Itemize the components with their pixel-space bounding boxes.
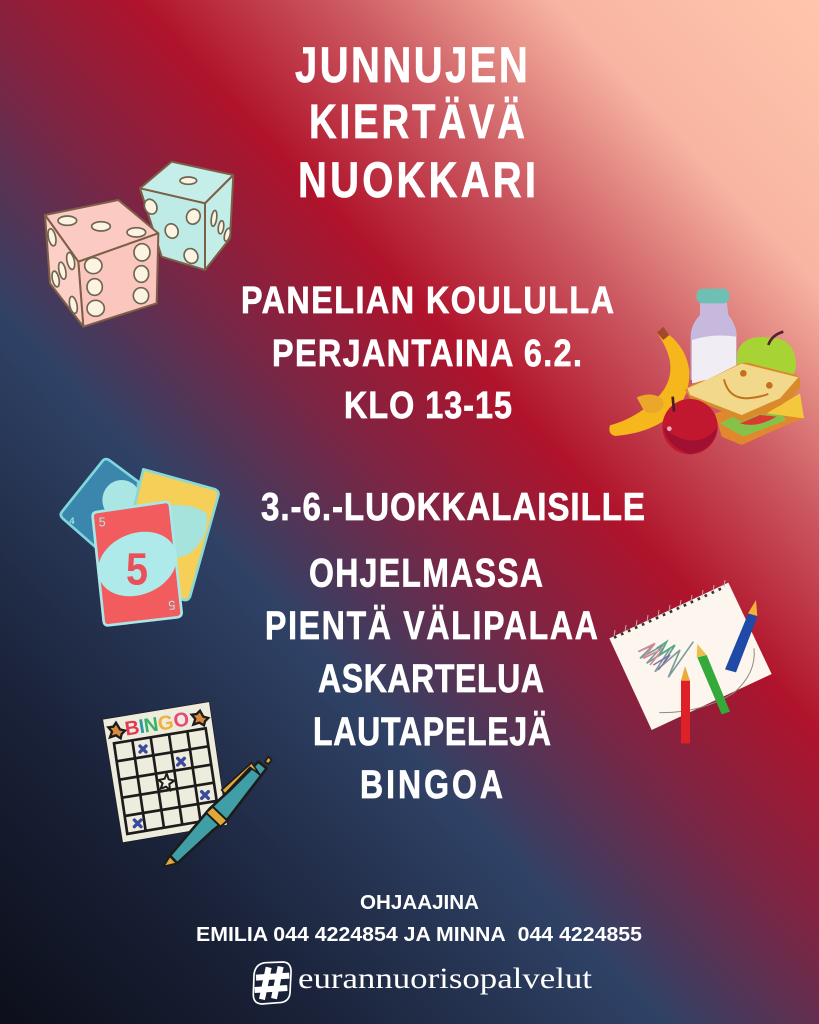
red card	[93, 502, 182, 625]
programme list: PIENTÄ VÄLIPALAA	[265, 603, 598, 648]
green apple	[737, 337, 796, 380]
title: NUOKKARI	[298, 152, 536, 208]
green pencil	[697, 655, 730, 714]
red pencil	[681, 681, 690, 743]
instructors: OHJAAJINA	[360, 892, 479, 914]
milk bottle	[691, 301, 737, 380]
title	[295, 37, 536, 208]
icon: playing cards: 4	[69, 516, 75, 526]
programme list: OHJELMASSA	[309, 550, 543, 595]
bingo word: G	[156, 711, 175, 736]
blue card	[61, 459, 138, 550]
icon: hashtag badge	[253, 962, 291, 1004]
title: JUNNUJEN	[295, 37, 528, 93]
blue pencil	[725, 613, 757, 672]
event place and time	[241, 280, 614, 427]
social handle: eurannuorisopalvelut	[298, 963, 593, 995]
bingo word	[123, 708, 191, 741]
icon: bingo card and pen	[103, 702, 272, 867]
bingo word: N	[142, 714, 160, 738]
instructors: EMILIA 044 4224854 JA MINNA 044 4224855	[196, 924, 642, 946]
pen	[163, 856, 177, 867]
icon: playing cards: 5	[126, 544, 148, 595]
sandwich bread	[685, 363, 800, 422]
bingo word: O	[172, 708, 191, 733]
yellow card	[117, 469, 219, 600]
event place and time: KLO 13-15	[344, 385, 512, 427]
event place and time: PANELIAN KOULULLA	[241, 280, 614, 322]
icon: playing cards	[61, 459, 219, 625]
programme list: ASKARTELUA	[318, 656, 544, 701]
instructors	[196, 892, 642, 946]
icon: playing cards: 5	[168, 598, 176, 612]
icon: dice	[45, 162, 233, 327]
sandwich filling	[715, 395, 804, 445]
icon: snack food	[609, 289, 804, 454]
bingo word: B	[123, 717, 141, 741]
icon: playing cards: 5	[99, 516, 106, 530]
target group: 3.-6.-LUOKKALAISILLE	[261, 484, 645, 529]
programme list	[265, 550, 598, 807]
red apple	[662, 399, 718, 454]
programme list: BINGOA	[360, 762, 503, 807]
programme list: LAUTAPELEJÄ	[313, 709, 551, 754]
banana	[609, 327, 689, 436]
bingo word: I	[137, 716, 146, 738]
icon: sketchbook and pencils	[609, 580, 772, 743]
title: KIERTÄVÄ	[309, 96, 525, 149]
event place and time: PERJANTAINA 6.2.	[272, 333, 582, 375]
